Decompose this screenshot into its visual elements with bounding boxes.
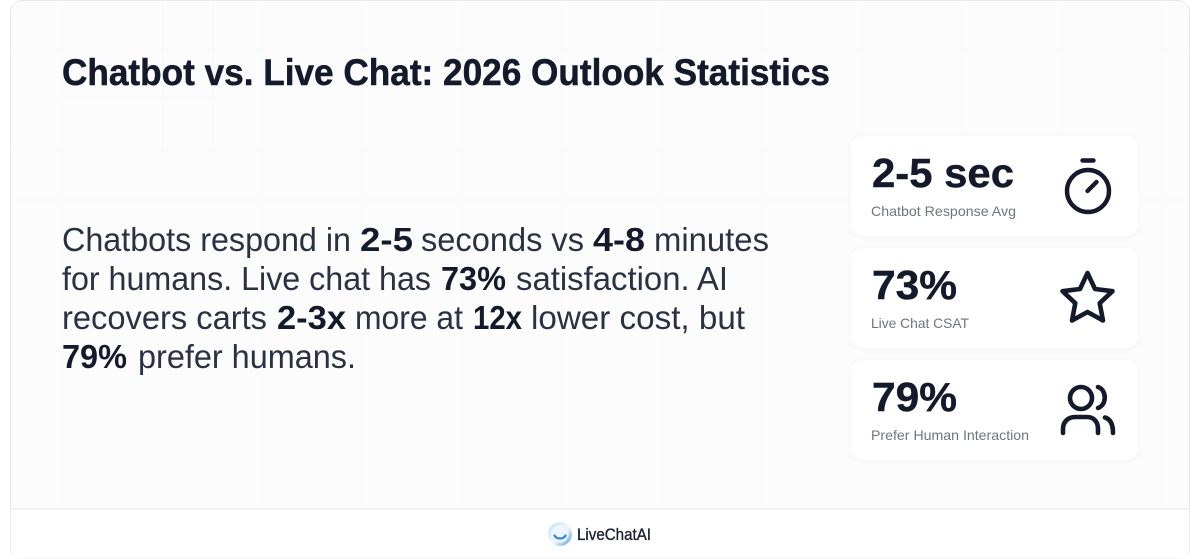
summary paragraph xyxy=(62,221,769,375)
summary paragraph: 73% xyxy=(441,260,506,297)
summary paragraph: more at xyxy=(355,299,463,336)
summary paragraph: recovers carts xyxy=(62,299,267,336)
stat card: chatbot response xyxy=(851,136,1138,236)
summary paragraph: for humans. Live chat has xyxy=(62,260,431,297)
summary paragraph: 4-8 xyxy=(593,221,645,258)
stat label: live chat CSAT: Live Chat CSAT xyxy=(871,315,969,331)
stat label: chatbot response: Chatbot Response Avg xyxy=(871,203,1016,219)
icon: users xyxy=(1063,387,1113,433)
brand name: LiveChatAI xyxy=(577,526,651,544)
icon: LiveChatAI logo xyxy=(548,522,572,546)
icon: stopwatch xyxy=(1067,160,1109,212)
icon: star xyxy=(1062,273,1112,320)
stat card: live chat CSAT xyxy=(851,248,1138,348)
summary paragraph: seconds vs xyxy=(421,221,584,258)
summary paragraph: Chatbots respond in xyxy=(62,221,351,258)
footer bar xyxy=(11,509,1189,558)
summary paragraph: minutes xyxy=(654,221,769,258)
summary paragraph: prefer humans. xyxy=(138,338,356,375)
summary paragraph: 2-3x xyxy=(277,299,347,336)
stat value: 73%: 73% xyxy=(872,262,957,308)
summary paragraph: 12x xyxy=(473,299,523,336)
stat card: prefer human interaction xyxy=(851,360,1138,460)
summary paragraph: satisfaction. AI xyxy=(516,260,728,297)
stat label: prefer human interaction: Prefer Human Interaction xyxy=(871,427,1029,443)
summary paragraph: 79% xyxy=(62,338,127,375)
summary paragraph: lower cost, but xyxy=(531,299,745,336)
stat value: 79%: 79% xyxy=(872,374,957,420)
summary paragraph: 2-5 xyxy=(360,221,413,258)
stat value: 2-5 sec: 2-5 sec xyxy=(872,150,1014,196)
title: Chatbot vs. Live Chat: 2026 Outlook Statistics xyxy=(62,52,830,93)
